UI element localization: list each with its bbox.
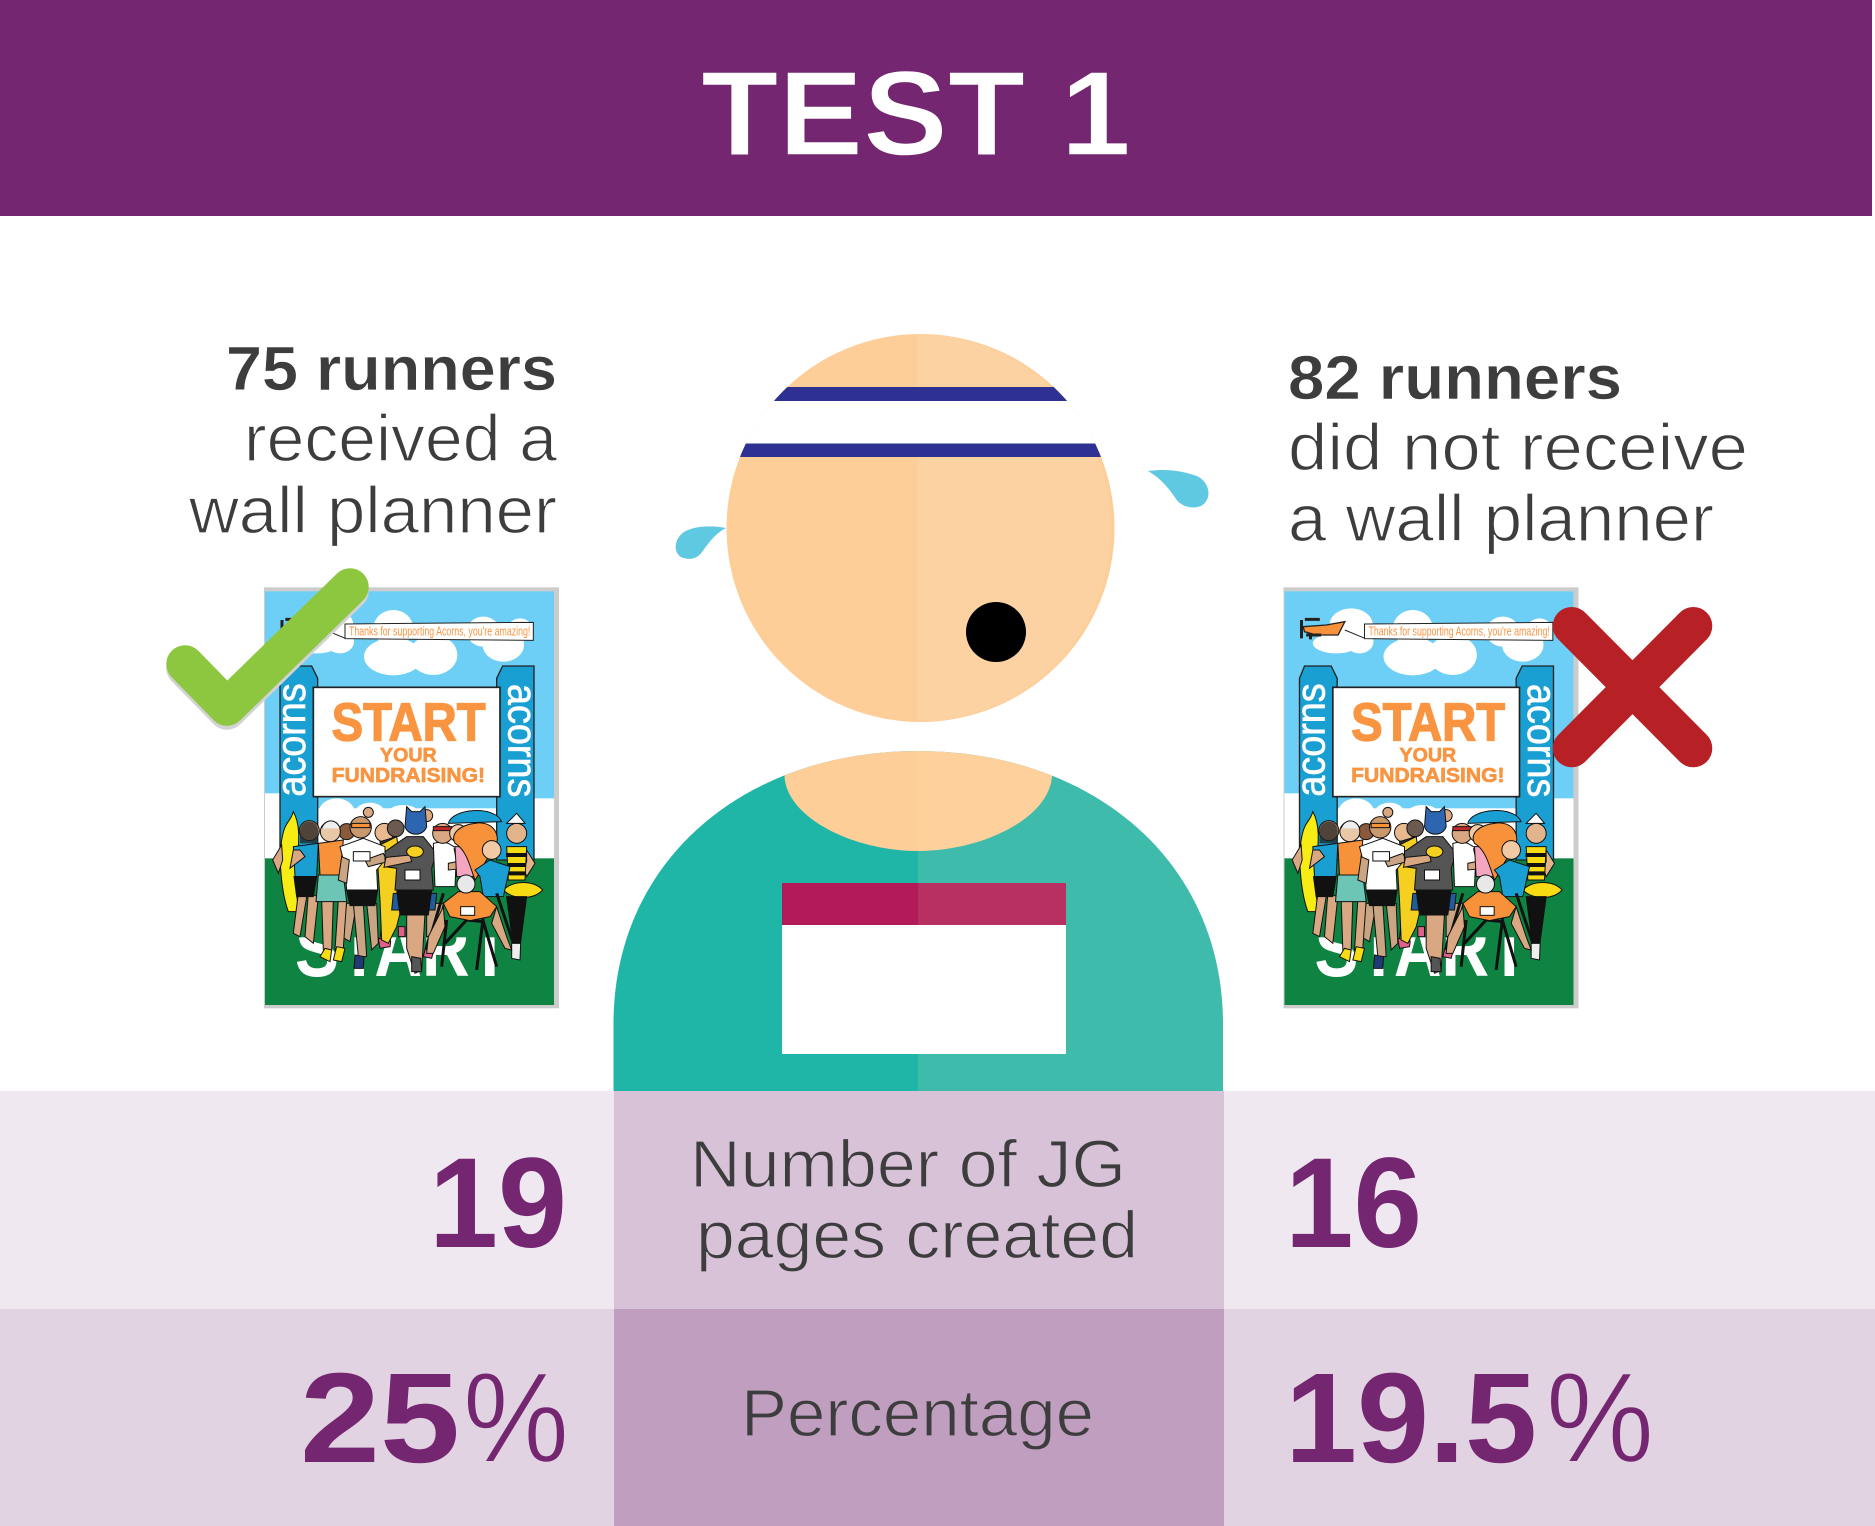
neck	[784, 740, 1052, 851]
left group text: 75 runners received a wall planner: 75 runners	[226, 335, 557, 404]
value left: 25%	[300, 1347, 569, 1490]
title: TEST 1	[701, 45, 1131, 181]
poster: left wall planner: acorns	[268, 683, 314, 797]
left group text: 75 runners received a wall planner: wall planner	[188, 473, 557, 547]
runner body	[614, 740, 1223, 1092]
icon: green tick	[185, 587, 350, 711]
poster: left wall planner: YOUR	[380, 746, 437, 767]
poster: left wall planner: acorns	[499, 684, 545, 797]
table row: percentage	[0, 1309, 1875, 1526]
poster: right wall planner: acorns	[1519, 684, 1565, 797]
left group text: 75 runners received a wall planner	[188, 335, 557, 547]
row label	[690, 1127, 1138, 1273]
row label: pages created	[696, 1198, 1138, 1273]
poster: right wall planner	[1283, 587, 1578, 1008]
poster: right wall planner: Thanks for supporting Acorns, you're amazing!	[1368, 623, 1550, 638]
right group text: 82 runners did not receive a wall planner: a wall planner	[1288, 481, 1714, 555]
poster: left wall planner: START	[332, 693, 486, 752]
poster: right wall planner: START	[1314, 904, 1529, 993]
value right: 19.5%	[1285, 1347, 1654, 1490]
value right: 19.5%: 19.5	[1285, 1347, 1537, 1490]
poster: right wall planner: acorns	[1287, 683, 1333, 797]
poster: right wall planner: START	[1351, 693, 1505, 752]
poster: left wall planner: Thanks for supporting Acorns, you're amazing!	[349, 623, 530, 638]
icon: red cross	[1572, 626, 1693, 748]
figure: runner	[614, 334, 1223, 1092]
poster: right wall planner: FUNDRAISING!	[1351, 764, 1504, 787]
mouth	[966, 602, 1026, 662]
headband	[720, 387, 1120, 457]
right group text: 82 runners did not receive a wall planner: did not receive	[1288, 410, 1748, 484]
value left: 19: 19	[429, 1132, 567, 1275]
left group text: 75 runners received a wall planner: received a	[244, 401, 557, 475]
sweat drop right	[1148, 470, 1208, 507]
right group text: 82 runners did not receive a wall planner	[1288, 344, 1748, 555]
value right: 16: 16	[1285, 1132, 1422, 1275]
runner head	[720, 334, 1120, 722]
poster: left wall planner	[264, 587, 559, 1008]
row label: Percentage	[741, 1376, 1094, 1451]
race bib	[782, 883, 1066, 1054]
value right: 19.5%: %	[1546, 1347, 1654, 1490]
row label: Number of JG	[690, 1127, 1126, 1202]
value left: 25%: %	[463, 1347, 569, 1490]
poster: left wall planner: FUNDRAISING!	[332, 764, 485, 787]
poster: right wall planner: YOUR	[1399, 746, 1456, 767]
value left: 25%: 25	[300, 1347, 460, 1490]
poster: left wall planner: START	[295, 904, 510, 993]
header banner	[0, 0, 1872, 216]
table row: pages created	[0, 1091, 1875, 1310]
right group text: 82 runners did not receive a wall planner: 82 runners	[1288, 344, 1622, 413]
sweat drop left	[676, 526, 726, 559]
